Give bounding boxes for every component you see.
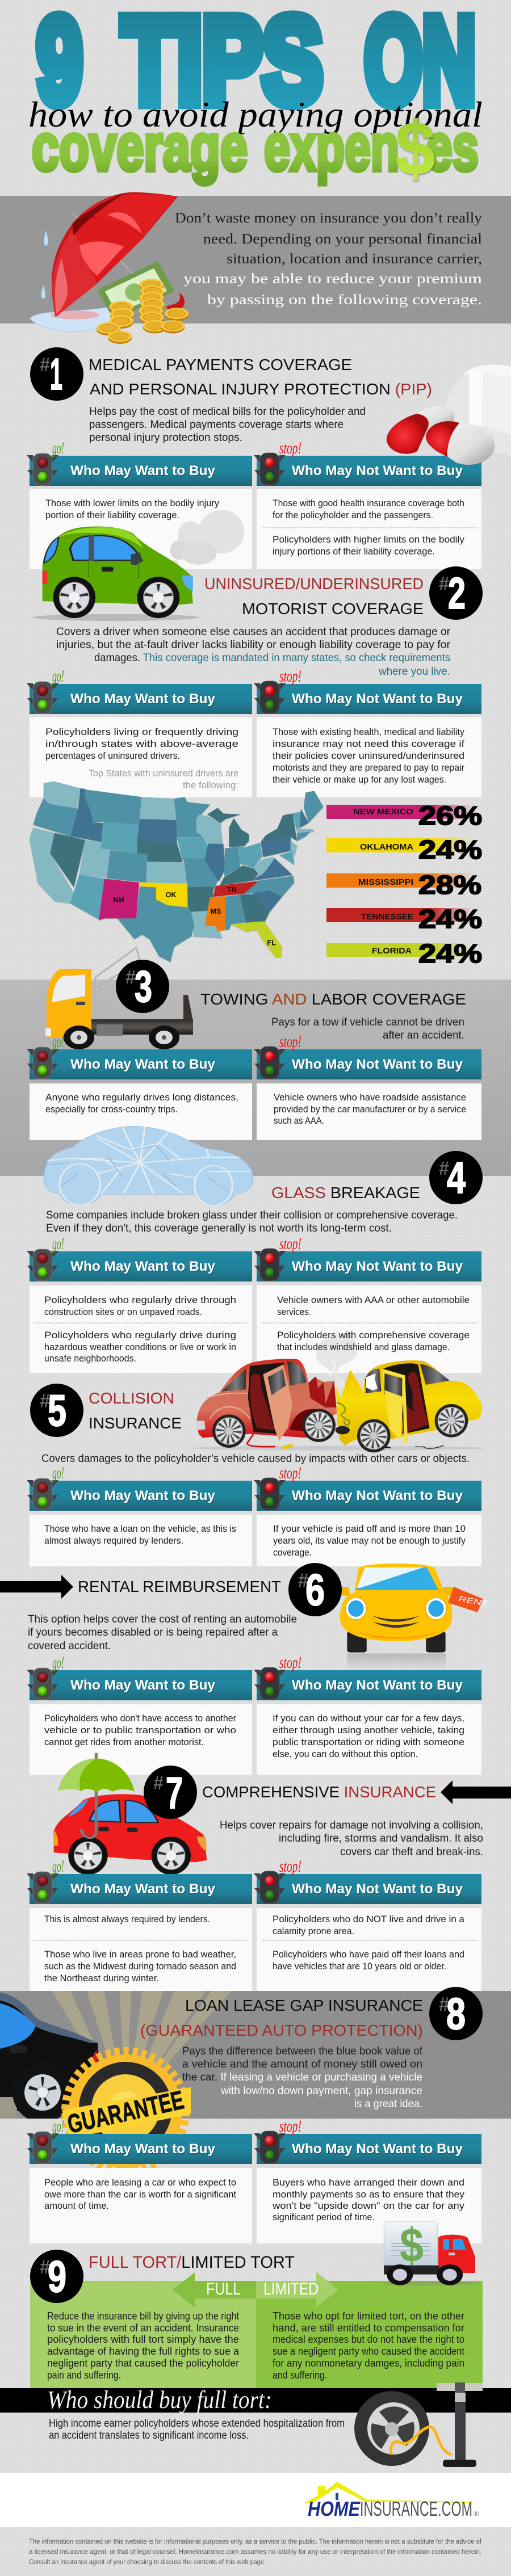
header: who may want to buy: Who May Want to Buy: [70, 1678, 216, 1693]
icon: smoke from crash: [316, 1334, 357, 1397]
text: section 6 who may not want to buy: else, you can do without this option.: [273, 1749, 418, 1759]
text: section 7 who may want to buy: such as the Midwest during tornado season and: [44, 1961, 236, 1972]
legend: Tennessee: TENNESSEE: [361, 912, 413, 922]
icon: red car under green umbrella: [53, 1753, 207, 1875]
header: who may not want to buy: stop!: [279, 1464, 301, 1482]
header: who may want to buy: go!: [52, 1653, 64, 1672]
icon: green car: [32, 527, 199, 621]
text: section 6 who may want to buy: cannot get rides from another motorist.: [44, 1737, 204, 1747]
header: who may want to buy: [27, 1234, 252, 1281]
header: who may not want to buy: [254, 667, 481, 714]
badge 8: #: [439, 1994, 449, 2015]
text: section 4 who may not want to buy: Policyholders with comprehensive coverage: [277, 1330, 470, 1340]
panels: section 2: [30, 717, 481, 797]
header: who may want to buy: Who May Want to Buy: [70, 1259, 216, 1274]
heading 2: MOTORIST COVERAGE: [242, 600, 424, 617]
text: section 6 description: covered accident.: [28, 1640, 111, 1652]
header: who may want to buy: [27, 2117, 252, 2164]
panels: section 8: [30, 2168, 481, 2243]
text: section 8 description: with low/no down payment, gap insurance: [220, 2085, 422, 2097]
text: section 1 description: personal injury protection stops.: [89, 432, 242, 444]
text: section 5 who may want to buy: [44, 1524, 236, 1546]
badge 3: 3: [135, 961, 152, 1011]
text: section 7 who may want to buy: This is almost always required by lenders.: [44, 1914, 210, 1924]
title: expen: [264, 110, 399, 184]
header: who may not want to buy: Who May Not Want to Buy: [292, 1057, 463, 1072]
intro text: Don’t waste money on insurance you don’t really: [175, 211, 483, 226]
text: section 4 who may want to buy: hazardous weather conditions or live or work in: [44, 1342, 236, 1352]
header: who may not want to buy: [254, 1032, 481, 1079]
header: who may not want to buy: [254, 439, 481, 486]
panels: section 1: [30, 489, 481, 569]
title: how to avoid paying optional: [28, 94, 483, 135]
text: limited tort: [273, 2310, 464, 2381]
intro text: situation, location and insurance carrier,: [227, 251, 482, 267]
text: section 7 who may want to buy: the Northeast during winter.: [44, 1973, 159, 1984]
text: who should buy full tort: an accident translates to significant income loss.: [49, 2430, 249, 2441]
legend: Florida: [326, 939, 482, 968]
text: section 6 who may want to buy: vehicle or to public transportation or who: [44, 1725, 236, 1735]
text: section 1 who may want to buy: portion of their liability coverage.: [45, 510, 179, 520]
text: section 7 who may want to buy: [33, 1914, 249, 1984]
text: limited tort: Those who opt for limited tort, on the other: [273, 2310, 464, 2322]
header: who may want to buy: go!: [52, 1464, 64, 1482]
badge 9: #: [40, 2256, 50, 2278]
arrow: limited: [256, 2272, 338, 2307]
header: who may not want to buy: [254, 1234, 481, 1281]
legend: Oklahoma: 24%: [418, 835, 482, 864]
heading 3: TOWING AND LABOR COVERAGE: [200, 990, 466, 1008]
header: who may want to buy: [27, 1464, 252, 1511]
panel: logo band: [0, 2473, 511, 2527]
panels: section 7: [30, 1908, 481, 1991]
title: $: [396, 107, 435, 190]
heading 2: [204, 575, 424, 617]
heading 8: LOAN LEASE GAP INSURANCE: [185, 1997, 423, 2014]
text: section 5 description: Covers damages to the policyholder’s vehicle caused by impacts with other cars or objects.: [41, 1453, 470, 1465]
heading 1: AND PERSONAL INJURY PROTECTION (PIP): [90, 380, 432, 398]
text: section 1 who may not want to buy: Policyholders with higher limits on the bodily: [273, 535, 465, 545]
rays behind guarantee badge: [52, 1991, 231, 2069]
header: who may not want to buy: [254, 1857, 481, 1904]
header: who may not want to buy: stop!: [279, 439, 301, 457]
text: section 5 who may not want to buy: [273, 1524, 466, 1558]
text: section 6 who may want to buy: [44, 1713, 236, 1747]
logo: HomeInsurance.com: ®: [474, 2509, 479, 2518]
badge 3: [116, 960, 169, 1013]
state: Florida: FL: [267, 939, 276, 947]
title: [28, 0, 483, 190]
text: section 8 who may want to buy: owe more than the car is worth for a significant: [44, 2190, 236, 2200]
text: section 8 who may not want to buy: won't be "upside down" on the car for any: [272, 2201, 465, 2211]
text: section 1 who may not want to buy: [263, 498, 478, 557]
text: section 2 who may not want to buy: [273, 727, 465, 785]
text: section 8 description: Pays the difference between the blue book value of: [182, 2045, 423, 2057]
text: section 4 description: Some companies include broken glass under their collision or comprehensive coverage.: [46, 1209, 458, 1221]
header: who may not want to buy: Who May Not Want to Buy: [292, 463, 463, 478]
text: section 6 who may not want to buy: either through using another vehicle, taking: [273, 1725, 464, 1735]
text: section 7 description: Helps cover repairs for damage not involving a collision,: [220, 1819, 483, 1831]
legend: Tennessee: [326, 904, 482, 934]
text: full tort: policyholders with full tort simply have the: [47, 2334, 239, 2345]
header: who may not want to buy: Who May Not Want to Buy: [292, 1881, 463, 1897]
text: limited tort: for any nonmonetary damges, including pain: [273, 2358, 464, 2369]
header: who may want to buy: [27, 439, 252, 486]
badge 9: 9: [48, 2251, 66, 2301]
header: who may want to buy: go!: [52, 667, 64, 686]
text: section 3 who may not want to buy: such as AAA.: [274, 1116, 324, 1126]
text: section 7 description: [220, 1819, 483, 1858]
header: who may want to buy: Who May Want to Buy: [70, 1057, 216, 1072]
badge 8: [429, 1987, 483, 2040]
state: New Mexico: [99, 879, 139, 921]
legend: Florida: 24%: [418, 939, 482, 968]
text: section 2 who may want to buy: in/through states with above-average: [45, 739, 238, 749]
intro text: need. Depending on your personal financial: [203, 232, 482, 247]
icon: money truck: [382, 2221, 479, 2285]
icon: guarantee badge: [62, 2051, 191, 2171]
header: who may not want to buy: stop!: [279, 1857, 301, 1876]
text: full tort: advantage of having the full rights to sue a: [47, 2346, 240, 2357]
state: Tennessee: [213, 881, 258, 897]
text: full tort: to sue in the event of an accident. Insurance: [47, 2322, 239, 2334]
text: section 4 who may not want to buy: that includes windshield and glass damage.: [277, 1342, 450, 1352]
text: section 2 who may want to buy: Top States with uninsured drivers are: [89, 768, 238, 779]
text: section 3 who may not want to buy: provided by the car manufacturer or by a service: [274, 1104, 466, 1115]
heading 9: FULL TORT/LIMITED TORT: [89, 2253, 295, 2272]
header: who may not want to buy: stop!: [279, 667, 301, 686]
arrow: pointing right: [0, 1575, 73, 1599]
badge 6: #: [298, 1570, 308, 1591]
header: who may want to buy: go!: [52, 1032, 64, 1051]
legend: New Mexico: 26%: [418, 801, 482, 830]
header: who may want to buy: go!: [52, 2117, 64, 2136]
footer disclaimer: The information contained on this website is for informational purposes only, as a service to the public. The information herein is not a substitute for the advice of: [29, 2539, 482, 2545]
text: section 7 description: covers car theft and break-ins.: [340, 1846, 483, 1858]
header: who may not want to buy: Who May Not Want to Buy: [292, 2141, 463, 2157]
text: section 2 who may want to buy: the following:: [183, 780, 238, 791]
legend: Florida: FLORIDA: [372, 946, 412, 956]
header: who may not want to buy: Who May Not Want to Buy: [292, 1678, 463, 1693]
text: section 8 who may want to buy: [44, 2178, 236, 2211]
badge 4: #: [439, 1158, 449, 1179]
text: section 8 who may want to buy: amount of time.: [44, 2201, 109, 2211]
text: section 6 description: This option helps cover the cost of renting an automobile: [28, 1613, 297, 1625]
header: who may not want to buy: stop!: [279, 1234, 301, 1253]
text: who should buy full tort: High income earner policyholders whose extended hospitalization from: [49, 2418, 345, 2430]
icon: yellow rental car: [336, 1564, 489, 1670]
header: who may want to buy: Who May Want to Buy: [70, 1488, 216, 1503]
footer disclaimer: a licensed insurance agent, or that of legal counsel. HomeInsurance.com assumes no liability for any use or interpretation of the information contained herein.: [29, 2549, 481, 2556]
text: section 7 who may want to buy: Those who live in areas prone to bad weather,: [44, 1949, 236, 1960]
header: who may want to buy: go!: [52, 1857, 64, 1876]
text: section 8 who may not want to buy: monthly payments so as to ensure that they: [273, 2190, 465, 2200]
legend: New Mexico: NEW MEXICO: [353, 807, 413, 817]
text: who should buy full tort: [49, 2418, 345, 2441]
header: who may want to buy: [27, 1653, 252, 1700]
header: who may want to buy: Who May Want to Buy: [70, 463, 216, 478]
arrow: limited: LIMITED: [263, 2280, 319, 2298]
heading 4: GLASS BREAKAGE: [271, 1184, 420, 1201]
heading 2: UNINSURED/UNDERINSURED: [204, 575, 424, 592]
text: section 5 who may want to buy: Those who have a loan on the vehicle, as this is: [44, 1524, 236, 1534]
state: Florida: [231, 921, 282, 957]
header: who may not want to buy: Who May Not Want to Buy: [292, 1259, 463, 1274]
badge 9: [30, 2250, 83, 2303]
header: who may want to buy: [27, 1857, 252, 1904]
panels: section 6: [30, 1704, 481, 1775]
header: who may not want to buy: stop!: [279, 1032, 301, 1051]
text: full tort: Reduce the insurance bill by giving up the right: [47, 2310, 239, 2322]
text: limited tort: hand, are still entitled to compensation for: [273, 2322, 464, 2334]
text: section 3 who may not want to buy: Vehicle owners who have roadside assistance: [274, 1092, 466, 1103]
header: who may not want to buy: [254, 2117, 481, 2164]
legend: Mississippi: 28%: [418, 870, 481, 900]
panel: section 3 band: [0, 980, 511, 1176]
icon: white tablet: [445, 365, 511, 456]
state: Mississippi: MS: [210, 907, 221, 915]
badge 2: #: [439, 573, 449, 595]
text: section 6 who may not want to buy: If you can do without your car for a few days,: [273, 1713, 464, 1724]
text: section 5 who may want to buy: almost always required by lenders.: [44, 1536, 183, 1546]
panel: section 8 band: [0, 1991, 511, 2119]
badge 5: [30, 1384, 83, 1437]
heading 5: INSURANCE: [89, 1414, 182, 1432]
heading 1: MEDICAL PAYMENTS COVERAGE: [89, 356, 352, 373]
header: who may not want to buy: stop!: [279, 1653, 301, 1672]
text: section 5 who may not want to buy: years old, its value may not be enough to justify: [273, 1536, 466, 1546]
badge 6: 6: [305, 1565, 325, 1615]
footer disclaimer: Consult an insurance agent of your choosing to discuss the contents of this web page.: [29, 2559, 266, 2566]
text: section 7 description: including fire, storms and vandalism. It also: [279, 1833, 483, 1844]
text: section 6 who may want to buy: Policyholders who don't have access to another: [44, 1713, 236, 1724]
title: coverage: [32, 110, 248, 184]
text: section 4 description: [46, 1209, 458, 1234]
icon: shattered glass car: [44, 1126, 253, 1205]
header: who may want to buy: [27, 1032, 252, 1079]
text: section 3 description: Pays for a tow if vehicle cannot be driven: [271, 1016, 464, 1028]
text: section 4 description: Even if they don't, this coverage generally is not worth its long-term cost.: [46, 1222, 392, 1234]
badge 4: [429, 1151, 483, 1204]
header: who may not want to buy: [254, 1464, 481, 1511]
logo: HomeInsurance.com: HOME: [308, 2497, 361, 2520]
text: section 6 description: if yours becomes disabled or is being repaired after a: [28, 1627, 278, 1638]
text: section 8 who may not want to buy: significant period of time.: [273, 2212, 375, 2222]
panel: intro band: [0, 196, 511, 323]
text: section 2 who may not want to buy: motorists and they are prepared to pay to repair: [273, 763, 464, 773]
heading 5: [89, 1389, 182, 1432]
header: who may not want to buy: Who May Not Want to Buy: [292, 1488, 463, 1503]
badge 1: 1: [50, 349, 62, 399]
text: section 8 who may not want to buy: [272, 2178, 465, 2222]
text: full tort: negligent party that caused the policyholder: [47, 2358, 239, 2369]
panel: full tort: [30, 2281, 256, 2388]
header: who may not want to buy: Who May Not Want to Buy: [292, 691, 463, 707]
text: section 4 who may want to buy: [33, 1295, 249, 1364]
text: section 1 who may want to buy: Those with lower limits on the bodily injury: [45, 498, 220, 509]
intro text: you may be able to reduce your premium: [183, 271, 483, 287]
heading 6: RENTAL REIMBURSEMENT: [78, 1578, 281, 1595]
text: section 1 who may not want to buy: injury portions of their liability coverage.: [273, 547, 435, 557]
text: section 3 who may want to buy: [45, 1092, 238, 1115]
heading 5: COLLISION: [89, 1389, 174, 1407]
legend: Oklahoma: OKLAHOMA: [360, 842, 413, 852]
intro text: by passing on the following coverage.: [207, 292, 482, 308]
icon: capsules: [387, 406, 495, 465]
header: who may want to buy: go!: [52, 1234, 64, 1253]
footer disclaimer: [29, 2539, 482, 2566]
text: section 4 who may want to buy: unsafe neighborhoods.: [44, 1354, 136, 1364]
intro text: [175, 211, 483, 308]
badge 7: [144, 1766, 197, 1819]
heading 8: (GUARANTEED AUTO PROTECTION): [140, 2022, 423, 2039]
text: section 6 who may not want to buy: [273, 1713, 464, 1759]
panels: section 4: [30, 1285, 481, 1373]
text: section 2 who may not want to buy: their vehicle or make up for any lost wages.: [273, 775, 446, 785]
badge 8: 8: [446, 1989, 466, 2039]
text: section 2 description: [56, 626, 451, 678]
text: limited tort: medical expenses but do not have the right to: [273, 2334, 464, 2345]
legend: Mississippi: [326, 870, 481, 900]
arrow: full: [173, 2272, 256, 2308]
text: section 2 who may want to buy: Policyholders living or frequently driving: [45, 727, 238, 737]
text: section 2 description: where you live.: [378, 666, 450, 678]
text: section 8 who may not want to buy: Buyers who have arranged their down and: [273, 2178, 464, 2188]
text: section 2 description: Covers a driver when someone else causes an accident that produces damage or: [56, 626, 451, 638]
text: section 1 who may not want to buy: Those with good health insurance coverage both: [273, 498, 464, 509]
text: section 5 who may not want to buy: coverage.: [273, 1548, 312, 1558]
heading 8: [140, 1997, 423, 2039]
text: section 1 who may want to buy: [45, 498, 220, 520]
text: section 8 description: is a great idea.: [354, 2098, 422, 2110]
legend: Mississippi: MISSISSIPPI: [358, 877, 413, 887]
panels: section 5: [30, 1515, 481, 1566]
text: section 2 who may not want to buy: Those with existing health, medical and liability: [273, 727, 465, 737]
text: section 4 who may want to buy: Policyholders who regularly drive through: [44, 1295, 236, 1305]
text: section 2 description: damages. This coverage is mandated in many states, so check requirements: [94, 652, 450, 664]
text: limited tort: and suffering.: [273, 2369, 327, 2381]
header: who may want to buy: [27, 667, 252, 714]
map: US states with uninsured drivers: [30, 781, 323, 962]
text: section 2 who may want to buy: percentages of uninsured drivers.: [45, 751, 180, 761]
heading 1: [89, 356, 432, 398]
text: section 2 who may not want to buy: insurance may not need this coverage if: [273, 739, 464, 749]
arrow: pointing left: [441, 1780, 511, 1804]
text: full tort: [47, 2310, 240, 2381]
badge 4: 4: [447, 1153, 466, 1203]
text: section 4 who may not want to buy: services.: [277, 1307, 311, 1317]
icon: guarantee badge: GUARANTEE: [65, 2085, 186, 2139]
text: section 8 description: [182, 2045, 423, 2110]
text: section 1 who may not want to buy: for the policyholder and the passengers.: [273, 510, 433, 520]
badge 6: [288, 1563, 342, 1616]
text: section 4 who may want to buy: Policyholders who regularly drive during: [44, 1330, 236, 1340]
text: section 8 description: the car. If leasing a vehicle or purchasing a vehicle: [182, 2071, 422, 2083]
icon: tire and pump: [354, 2382, 483, 2467]
text: section 7 who may not want to buy: have vehicles that are 10 years old or older.: [273, 1961, 446, 1972]
text: section 4 who may not want to buy: [262, 1295, 478, 1352]
text: section 1 description: [89, 406, 366, 444]
state: Oklahoma: OK: [165, 891, 177, 899]
text: section 3 who may want to buy: Anyone who regularly drives long distances,: [45, 1092, 238, 1103]
badge 1: [30, 347, 83, 401]
icon: yellow rental car: RENT: [457, 1595, 489, 1608]
badge 2: [429, 566, 483, 620]
text: section 3 description: [271, 1016, 464, 1041]
text: section 3 who may want to buy: especially for cross-country trips.: [45, 1104, 178, 1115]
state: Mississippi: [205, 896, 225, 931]
logo: HomeInsurance.com: [305, 2482, 479, 2520]
state: Tennessee: TN: [227, 886, 237, 894]
state: Oklahoma: [139, 883, 188, 907]
text: limited tort: sue a negligent party who caused the accident: [273, 2346, 464, 2357]
text: section 7 who may not want to buy: Policyholders who do NOT live and drive in a: [273, 1914, 465, 1924]
panels: section 3: [30, 1083, 481, 1140]
state: New Mexico: NM: [113, 896, 124, 904]
icon: red umbrella with money and coins: [30, 192, 189, 344]
icon: smoke: [170, 510, 244, 566]
text: section 4 who may want to buy: construction sites or on unpaved roads.: [44, 1307, 202, 1317]
panel: limited tort: [256, 2281, 483, 2388]
badge 1: #: [40, 354, 50, 376]
badge 7: #: [153, 1772, 164, 1794]
text: section 1 description: passengers. Medical payments coverage starts where: [89, 419, 344, 431]
text: section 2 who may want to buy: [45, 727, 238, 791]
text: section 3 who may not want to buy: [274, 1092, 466, 1126]
text: section 2 description: injuries, but the at-fault driver lacks liability or enough liability coverage to pay for: [56, 639, 451, 651]
arrow: full: FULL: [206, 2280, 241, 2298]
heading 7: COMPREHENSIVE INSURANCE: [202, 1783, 436, 1801]
text: section 3 description: after an accident.: [383, 1029, 464, 1041]
text: full tort: pain and suffering.: [47, 2369, 121, 2381]
badge 5: 5: [48, 1385, 66, 1435]
heading: who should buy full tort: Who should buy full tort:: [47, 2386, 272, 2414]
text: section 8 who may want to buy: People who are leasing a car or who expect to: [44, 2178, 236, 2188]
badge 2: 2: [448, 568, 466, 618]
text: section 7 who may not want to buy: calamity prone area.: [273, 1926, 354, 1936]
badge 5: #: [40, 1390, 50, 1412]
header: who may want to buy: Who May Want to Buy: [70, 1881, 216, 1897]
text: section 2 who may not want to buy: their policies cover uninsured/underinsured: [273, 751, 464, 761]
icon: dark car: [0, 1993, 100, 2123]
icon: dollar sign on truck: $: [400, 2218, 424, 2272]
text: section 6 who may not want to buy: public transportation or riding with someone: [273, 1737, 464, 1747]
legend: Oklahoma: [326, 835, 482, 864]
header: who may want to buy: Who May Want to Buy: [70, 691, 216, 707]
text: section 1 description: Helps pay the cost of medical bills for the policyholder and: [89, 406, 366, 418]
text: section 5 who may not want to buy: If your vehicle is paid off and is more than 10: [273, 1524, 466, 1534]
icon: tow truck: [45, 948, 193, 1049]
badge 7: 7: [166, 1768, 183, 1818]
header: who may not want to buy: [254, 1653, 481, 1700]
text: section 8 description: a vehicle and the amount of money still owed on: [182, 2058, 422, 2070]
badge 3: #: [125, 966, 136, 988]
icon: crashed cars: [191, 1359, 487, 1452]
text: section 7 who may not want to buy: Policyholders who have paid off their loans and: [273, 1949, 464, 1960]
text: section 4 who may not want to buy: Vehicle owners with AAA or other automobile: [277, 1295, 470, 1305]
legend: New Mexico: [326, 801, 482, 830]
text: section 6 description: [28, 1613, 297, 1652]
title: es: [426, 110, 479, 184]
text: section 7 who may not want to buy: [262, 1914, 478, 1972]
header: who may want to buy: Who May Want to Buy: [70, 2141, 216, 2157]
legend: Tennessee: 24%: [418, 904, 482, 934]
header: who may want to buy: go!: [52, 439, 64, 457]
header: who may not want to buy: stop!: [279, 2117, 301, 2136]
panel: who should buy full tort band: [0, 2388, 511, 2413]
